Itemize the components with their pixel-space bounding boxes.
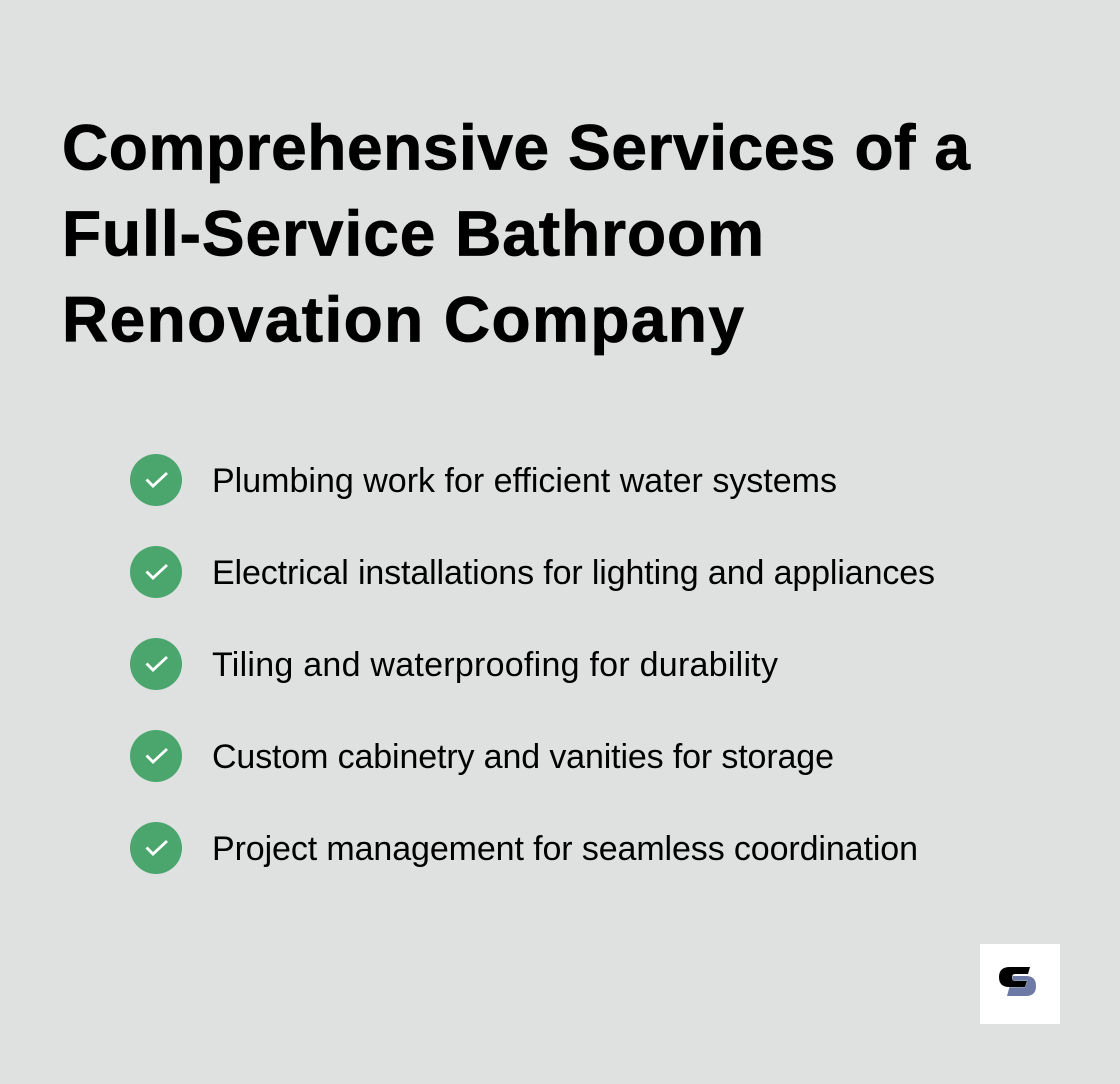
item: tiling	[130, 638, 778, 690]
item: project management: Project management for seamless coordination	[212, 830, 918, 868]
item: tiling: Tiling and waterproofing for durability	[212, 646, 778, 684]
item: plumbing	[130, 454, 837, 506]
item: electrical	[130, 546, 935, 598]
item: cabinetry	[130, 730, 834, 782]
item: electrical: Electrical installations for lighting and appliances	[212, 554, 935, 592]
item: plumbing: Plumbing work for efficient water systems	[212, 462, 837, 500]
title: Comprehensive Services of a	[62, 112, 970, 184]
item: project management	[130, 822, 918, 874]
title: Renovation Company	[62, 284, 744, 356]
logo	[980, 944, 1060, 1024]
title	[62, 112, 970, 356]
item: cabinetry: Custom cabinetry and vanities for storage	[212, 738, 834, 776]
title: Full-Service Bathroom	[62, 198, 764, 270]
checklist	[130, 454, 935, 874]
